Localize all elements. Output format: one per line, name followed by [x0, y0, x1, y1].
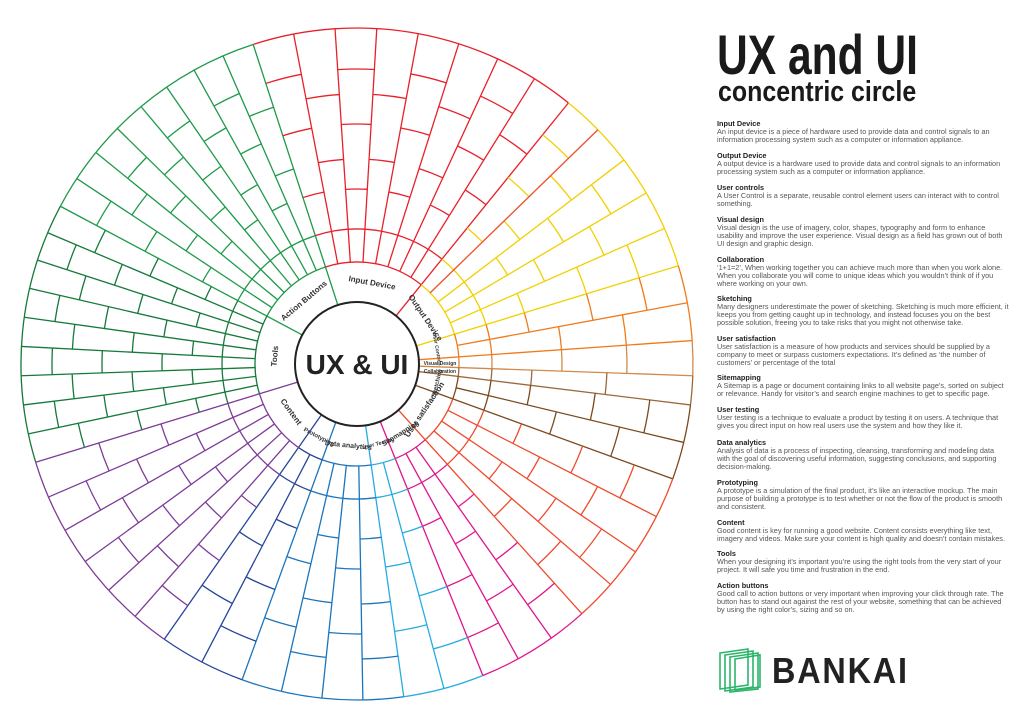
- definition: User testing: User testing is a technique to evaluate a product by testing it on users. A technique that gives you direct input on how real users use the system and how they like it.: [717, 413, 998, 430]
- category labels: Collaboration: [424, 369, 456, 375]
- logo text: BANKAI: [772, 650, 909, 691]
- definition: Sketching: Sketching: [717, 294, 752, 303]
- definition: User controls: User controls: [717, 183, 764, 192]
- definition: Content: Good content is key for running a good website. Content consists everything like text, imagery and videos. Make sure your content is high quality and doesn’t contain mistakes.: [717, 526, 1005, 543]
- definition: User controls: A User Control is a separate, reusable control element users can interact with to control something.: [717, 191, 999, 208]
- sector: User satisfaction: [0, 0, 788, 727]
- sector: Input Device: [0, 0, 780, 727]
- category labels: User Testing: [362, 437, 395, 451]
- definition: Output Device: A output device is a hardware used to provide data and control signals to an information processing system such as a computer or information appliance.: [717, 159, 1000, 176]
- category labels: [269, 274, 456, 452]
- category labels: Data analytics: [325, 440, 372, 452]
- sector: Output Device red-orange part: [430, 130, 598, 293]
- subtitle: concentric circle: [718, 76, 916, 108]
- definition: Tools: [717, 549, 1002, 574]
- definition: Visual design: Visual design: [717, 215, 764, 224]
- category labels: User Controls: [431, 332, 443, 366]
- definition: Data analytics: Data analytics: [717, 438, 766, 447]
- definition: User satisfaction: User satisfaction is a measure of how products and services should be supplied by a company to meet or surpass customers expectations. It’s defined as ‘the number of customers’ or percentage of the total: [717, 342, 990, 367]
- sector: Data analytics: [0, 0, 736, 727]
- definition: Prototyping: Prototyping: [717, 478, 758, 487]
- sector: User controls: [0, 0, 777, 727]
- definition: Input Device: An input device is a piece of hardware used to provide data and control signals to an information processing system such as a computer or information appliance.: [717, 127, 990, 144]
- definition: User satisfaction: User satisfaction: [717, 334, 776, 343]
- definition: Visual design: Visual design is the use of imagery, color, shapes, typography and form to enhance usability and improve the user experience. Visual design as a field has grown out of both UI design and graphic design.: [717, 223, 1002, 248]
- logo: BANKAI: [719, 648, 909, 693]
- sector: Visual Design: [0, 5, 716, 723]
- definition: Collaboration: ‘1+1=2’, When working together you can achieve much more than when you work alone. When you collaborate you will come to unique ideas which you wouldn’t think of if you where working on your own.: [717, 263, 1002, 288]
- definition: Action buttons: Good call to action buttons or very important when improving your click through rate. The button has to stand out against the rest of your website, something that can be achieved by using the right color’s, sizing and so on.: [717, 589, 1004, 614]
- category labels: Sitemapping: [381, 420, 420, 448]
- category labels: Visual Design: [424, 361, 456, 367]
- definition: Sitemapping: Sitemapping: [717, 373, 761, 382]
- definition: Sitemapping: [717, 373, 1004, 398]
- definition: User testing: [717, 405, 998, 430]
- sector: Tools: [0, 0, 777, 727]
- definition: Data analytics: Analysis of data is a process of inspecting, cleansing, transforming and modeling data with the goal of discovering useful information, suggesting conclusions, and supporting decision-making.: [717, 446, 996, 471]
- category labels: User satisfaction: [403, 380, 446, 439]
- definition: User controls: [717, 183, 999, 208]
- definition: Prototyping: A prototype is a simulation of the final product, it’s like an interactive mockup. The main purpose of building a prototype is to test whether or not the flow of the product is smooth and consistent.: [717, 486, 1002, 511]
- category labels: Output Device: [407, 293, 445, 343]
- definition: Sitemapping: A Sitemap is a page or document containing links to all website page’s, sorted on subject or relevance. Handy for visitor’s and search engine machines to get to specific page.: [717, 381, 1004, 398]
- concentric circle chart: [20, 27, 694, 701]
- icon: logo mark: [719, 648, 761, 693]
- definition: User testing: User testing: [717, 405, 759, 414]
- category labels: Tools: [269, 345, 280, 367]
- sector: Prototyping: [0, 0, 788, 727]
- category labels: Input Device: [348, 274, 397, 292]
- definition: Action buttons: Action buttons: [717, 581, 768, 590]
- definition: Tools: Tools: [717, 549, 736, 558]
- definition: Input Device: Input Device: [717, 119, 760, 128]
- definition: Collaboration: Collaboration: [717, 255, 764, 264]
- definition: Input Device: [717, 119, 990, 144]
- category labels: Prototyping: [302, 427, 335, 448]
- sector: Collaboration: [9, 16, 705, 712]
- sector: Action Buttons: [0, 0, 811, 727]
- definition: Output Device: [717, 151, 1000, 176]
- category labels: Sketching: [431, 368, 444, 398]
- center title: UX & UI: [306, 349, 408, 380]
- title: UX and UI: [717, 23, 918, 86]
- sector: Sketching: [0, 0, 731, 727]
- definition: Content: Content: [717, 518, 745, 527]
- category labels: Action Buttons: [279, 279, 329, 323]
- center circle: [295, 302, 419, 426]
- sector: User Testing: [0, 0, 794, 727]
- definition: Sketching: Many designers underestimate the power of sketching. Sketching is much more efficient, it keeps you from getting caught up in technology, and instead focuses you on the best possible solution, freeing you to take risks that you might not otherwise take.: [717, 302, 1008, 327]
- category labels: Content: [279, 397, 304, 427]
- definition: Content: [717, 518, 1005, 543]
- definition: Tools: When your designing it’s important you’re using the right tools from the very start of your project. It will safe you time and frustration in the end.: [717, 557, 1001, 574]
- definition: Output Device: Output Device: [717, 151, 766, 160]
